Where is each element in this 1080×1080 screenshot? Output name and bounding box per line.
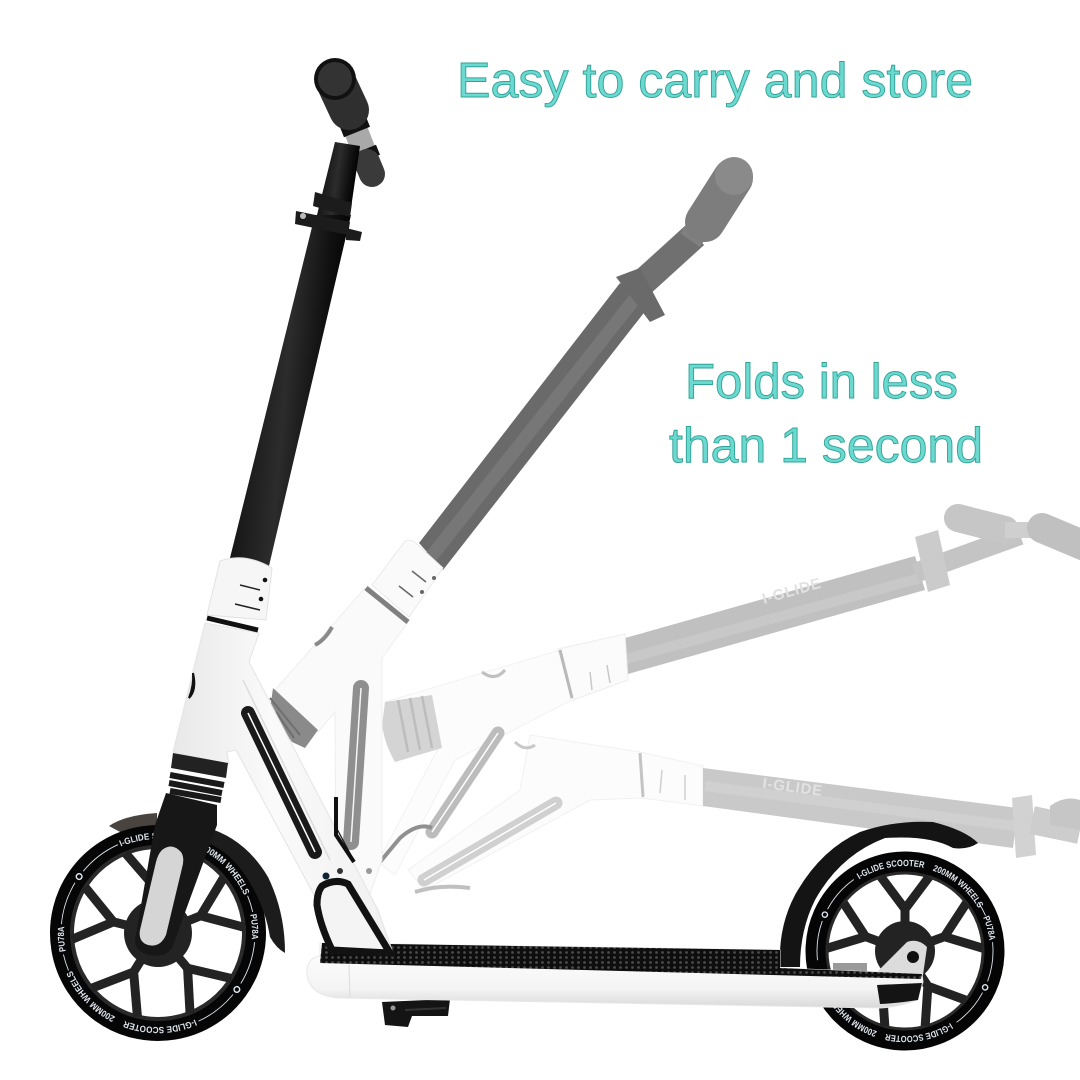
folding hinge plate (317, 881, 390, 953)
lever (336, 797, 354, 862)
rear wheel lettering: I-GLIDE SCOOTER (856, 860, 924, 880)
front wheel: PU78A (58, 926, 66, 952)
heading: folds in less than 1 second (669, 355, 983, 473)
kickstand (382, 999, 450, 1027)
ghost scooter: almost flat position: I-GLIDE (761, 775, 823, 800)
rear wheel: PU78A (983, 916, 996, 940)
frame and steering column (173, 58, 392, 950)
front wheel: 200MM WHEELS (66, 971, 116, 1022)
rear bracket (833, 941, 927, 975)
ghost scooter: almost flat position (408, 735, 1080, 892)
front fender (205, 827, 285, 953)
front wheel (50, 825, 266, 1041)
rear wheel: 200MM WHEELS (932, 865, 984, 908)
ghost scooter: low angle position (378, 518, 1080, 875)
deck (307, 943, 923, 1008)
handlebar (350, 115, 372, 172)
logo crescent (189, 673, 194, 698)
ghost scooter: low angle position: I-GLIDE (760, 575, 823, 608)
heading: folds in less than 1 second: than 1 second (669, 419, 983, 473)
fork (135, 793, 217, 956)
front wheel spokes (72, 849, 244, 1017)
collar (207, 558, 272, 620)
front wheel mudguard rear part (109, 813, 157, 833)
rear wheel: 200MM WHEELS (834, 1008, 877, 1037)
frame body (173, 623, 392, 950)
heading: folds in less than 1 second: Folds in less (685, 355, 958, 409)
stem clamp (313, 192, 352, 217)
front wheel: 200MM WHEELS (206, 846, 250, 894)
front wheel: I-GLIDE SCOOTER (124, 1020, 197, 1034)
fork silver plate (140, 846, 183, 946)
frame slot (248, 713, 315, 852)
rear wheel: I-GLIDE SCOOTER (885, 1023, 954, 1042)
rear wheel spokes (827, 877, 983, 1026)
rear fender (780, 822, 978, 967)
heading: easy to carry and store: Easy to carry and store (457, 54, 973, 108)
stem (229, 215, 351, 566)
ghost scooter: mid-fold position (270, 157, 753, 900)
front wheel: PU78A (250, 914, 258, 940)
rear wheel (806, 852, 1004, 1050)
spring (169, 753, 228, 800)
front wheel lettering: I-GLIDE SCOOTER (119, 832, 154, 846)
